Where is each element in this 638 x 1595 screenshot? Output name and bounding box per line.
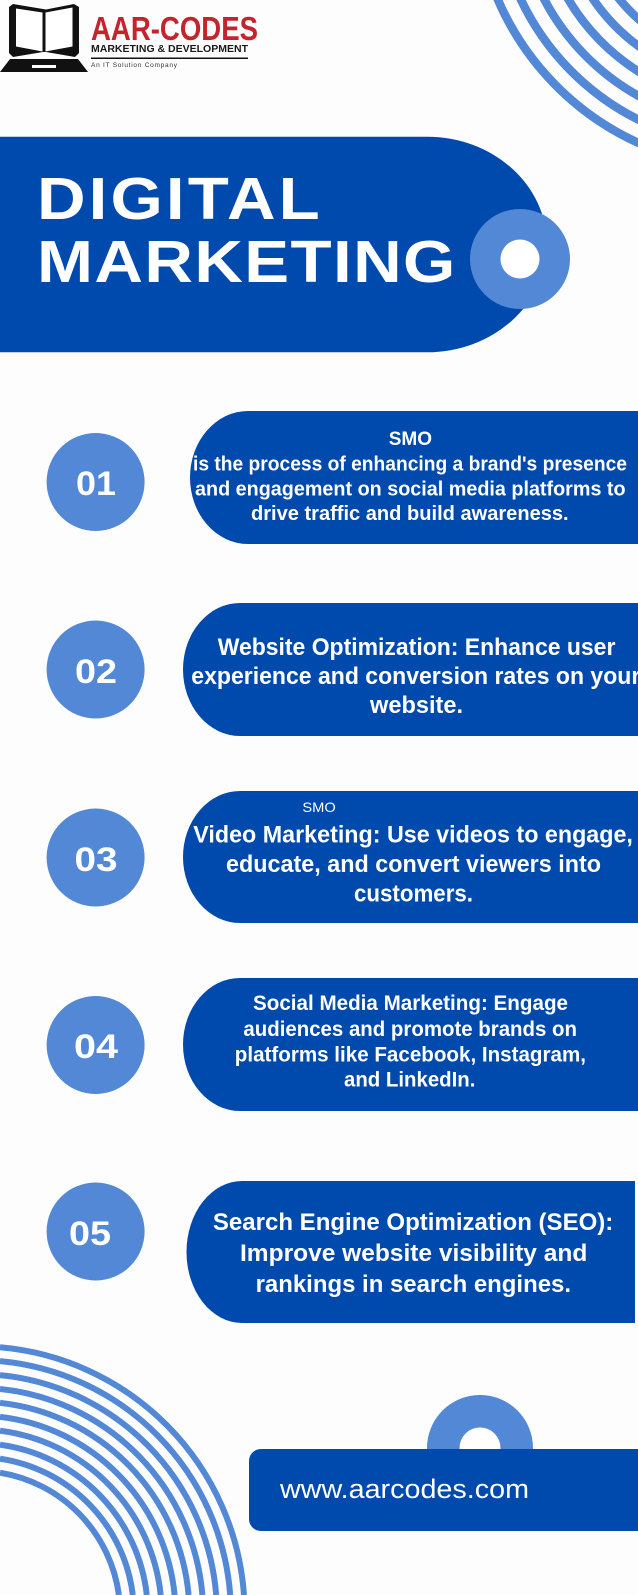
card text: website.: [369, 692, 463, 719]
card text: drive traffic and build awareness.: [251, 502, 569, 525]
card text: audiences and promote brands on: [243, 1017, 577, 1041]
logo subtitle: MARKETING & DEVELOPMENT: [91, 43, 249, 55]
number badge 01: [47, 433, 145, 531]
number badge 02: 02: [75, 653, 117, 691]
icon: title ring: [470, 209, 570, 309]
decorative arcs: top right: [496, 0, 638, 145]
icon: laptop with book screen: [0, 4, 88, 72]
number badge 04: [47, 996, 145, 1094]
card text: [213, 1209, 613, 1298]
website url: www.aarcodes.com: [279, 1474, 529, 1504]
number badge 02: [47, 620, 145, 718]
logo: AAR-CODES: [0, 4, 258, 72]
panel: social media marketing card: [183, 978, 638, 1111]
title: DIGITAL: [37, 167, 320, 232]
logo wordmark: AAR-CODES: [91, 10, 258, 47]
card text: platforms like Facebook, Instagram,: [235, 1043, 586, 1067]
step 01: [47, 411, 638, 544]
card heading: SMO: [389, 429, 432, 450]
footer ring: [427, 1395, 533, 1501]
step 03: [47, 791, 638, 923]
title: MARKETING: [37, 230, 455, 295]
panel: title banner: [0, 137, 570, 352]
step 04: [47, 978, 638, 1111]
card text: [193, 822, 633, 908]
number badge 03: [47, 808, 145, 906]
card text: [191, 634, 638, 719]
panel: website optimization card: [183, 603, 638, 736]
logo tagline: An IT Solution Company: [91, 62, 178, 69]
step 02: [47, 603, 638, 736]
card text: Website Optimization: Enhance user: [218, 634, 615, 661]
card text: and engagement on social media platforms to: [195, 478, 626, 501]
card text: [193, 453, 627, 525]
number badge 04: 04: [74, 1028, 118, 1066]
panel: video marketing card: [183, 791, 638, 923]
card text: Improve website visibility and: [240, 1240, 587, 1267]
number badge 01: 01: [76, 465, 116, 503]
card text: and LinkedIn.: [344, 1068, 475, 1092]
panel: SEO card: [187, 1181, 635, 1323]
stray SMO label: SMO: [302, 799, 336, 815]
number badge 05: 05: [69, 1215, 111, 1253]
number badge 05: [47, 1182, 145, 1280]
card text: educate, and convert viewers into: [226, 851, 601, 878]
panel: footer website bar: [249, 1449, 638, 1531]
card text: [235, 991, 586, 1092]
card text: Search Engine Optimization (SEO):: [213, 1209, 613, 1236]
card text: rankings in search engines.: [256, 1271, 571, 1298]
decorative arcs: bottom left: [0, 1347, 244, 1595]
title: [37, 167, 455, 295]
card text: Video Marketing: Use videos to engage,: [193, 822, 633, 849]
card text: Social Media Marketing: Engage: [253, 991, 568, 1015]
panel: SMO card: [190, 411, 638, 544]
number badge 03: 03: [74, 841, 118, 879]
step 05: [47, 1181, 635, 1323]
card text: customers.: [354, 881, 473, 908]
